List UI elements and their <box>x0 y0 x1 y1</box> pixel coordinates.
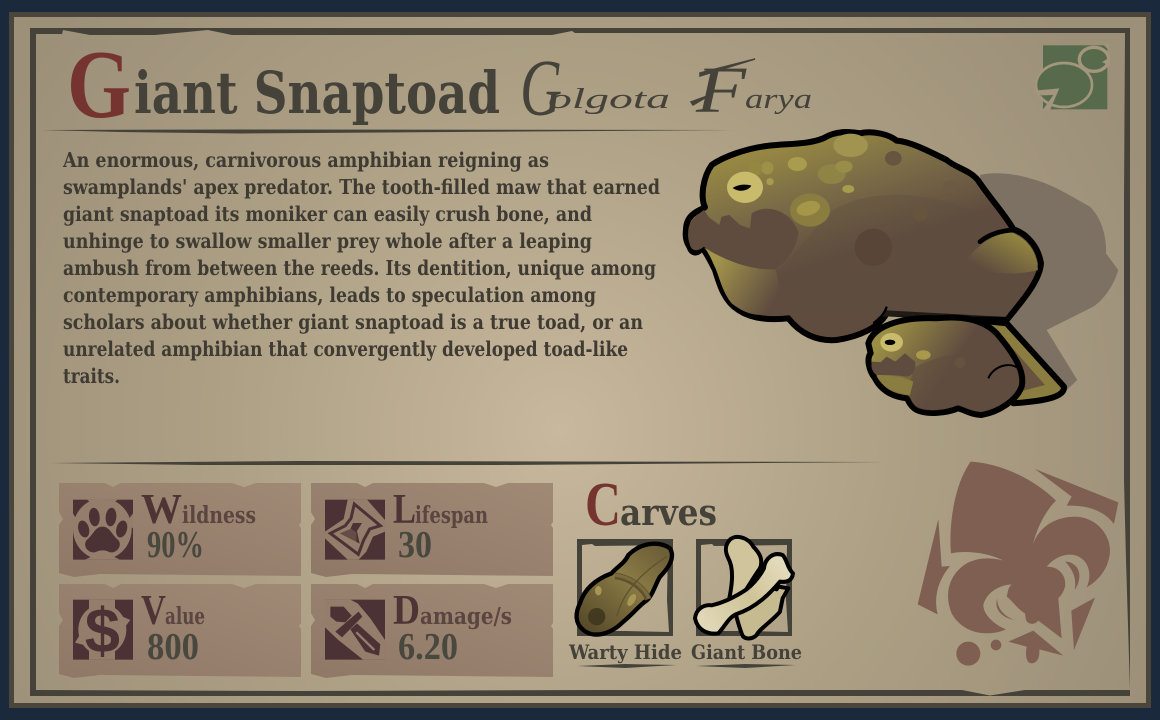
description: unrelated amphibian that convergently developed toad-like <box>63 337 628 361</box>
label: value: V <box>141 588 166 634</box>
cheek and skin spots <box>790 193 830 227</box>
icon: coin: $ <box>85 596 120 666</box>
icon: fleur emblem <box>918 462 1118 666</box>
scientific name: F <box>695 54 747 127</box>
title: iant Snaptoad <box>134 59 500 127</box>
description: ambush from between the reeds. Its dentition, unique among <box>63 256 656 280</box>
scientific name: olgota <box>548 84 670 115</box>
lower rule <box>50 461 885 465</box>
label: lifespan: L <box>393 487 416 533</box>
panel: value <box>59 584 301 678</box>
label: giant bone: Giant Bone <box>691 640 802 664</box>
label: lifespan: ifespan <box>415 502 488 529</box>
label: damage per second: D <box>393 588 420 634</box>
panel: wildness <box>59 483 301 577</box>
heading: carves: C <box>585 471 621 539</box>
big toad <box>686 132 1041 340</box>
title: G <box>67 31 131 139</box>
value: 90%: 90% <box>147 524 204 566</box>
small toad <box>868 318 1064 415</box>
panel: lifespan <box>311 483 553 577</box>
scientific name <box>520 45 812 133</box>
description <box>62 148 660 388</box>
description: scholars about whether giant snaptoad is a true toad, or an <box>63 310 643 334</box>
description: giant snaptoad its moniker can easily crush bone, and <box>63 202 592 226</box>
item frame <box>696 539 792 636</box>
icon: sword <box>325 600 385 660</box>
description: contemporary amphibians, leads to speculation among <box>63 283 596 307</box>
heading: carves: arves <box>620 492 717 534</box>
item frame <box>577 539 673 636</box>
label: wildness: W <box>141 487 182 533</box>
toad shadow <box>980 173 1118 397</box>
value: 6.20: 6.20 <box>398 626 458 668</box>
description: swamplands' apex predator. The tooth-filled maw that earned <box>63 175 660 199</box>
carve: warty hide <box>568 539 682 664</box>
description: unhinge to swallow smaller prey whole after a leaping <box>63 229 592 253</box>
label: value: alue <box>165 603 205 630</box>
icon: bones <box>695 537 793 639</box>
value: 30: 30 <box>398 524 432 566</box>
icon: logo lily pads <box>1035 44 1110 110</box>
label: damage per second: amage/s <box>420 603 512 630</box>
illustration: giant snaptoads <box>686 132 1118 415</box>
label: warty hide: Warty Hide <box>568 640 682 664</box>
scientific name: arya <box>745 84 812 115</box>
eye <box>727 172 763 203</box>
description: An enormous, carnivorous amphibian reigning as <box>62 148 549 172</box>
icon: hide roll <box>577 544 672 635</box>
panel: damage <box>311 584 553 678</box>
icon: paw <box>73 498 133 560</box>
description: traits. <box>63 364 120 388</box>
label: wildness: ildness <box>182 502 256 529</box>
scientific name: G <box>520 45 562 133</box>
carve: giant bone <box>691 537 802 664</box>
value: 800: 800 <box>147 626 199 668</box>
icon: hourglass <box>325 500 385 560</box>
title rule <box>42 130 735 134</box>
icon: coin <box>73 596 133 666</box>
